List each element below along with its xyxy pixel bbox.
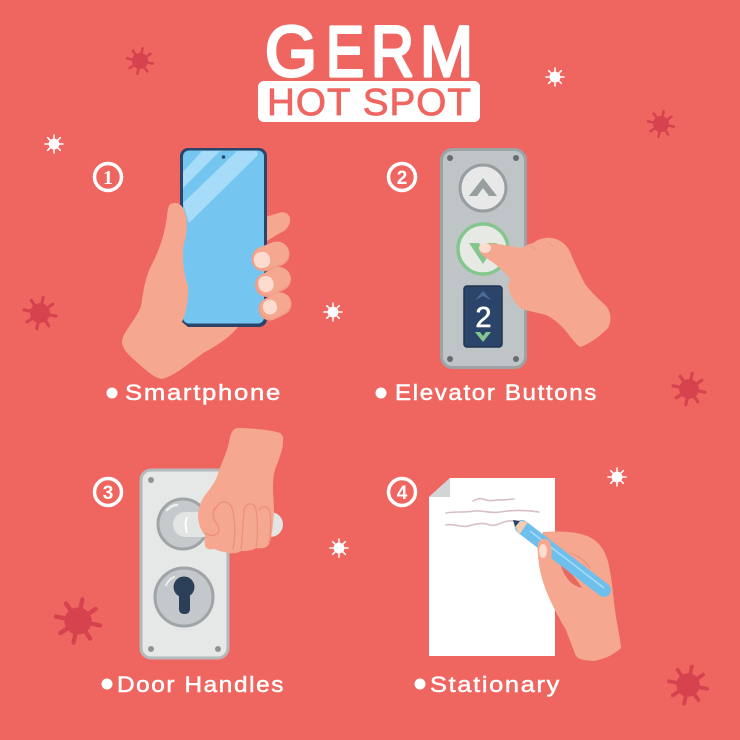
icon: index finger behind phone <box>262 212 290 244</box>
keyhole rosette <box>155 568 213 626</box>
badge: number 2 <box>388 164 416 190</box>
icon: thumb with nail <box>538 539 552 572</box>
button: down (pressed) <box>458 224 508 274</box>
icon: smartphone body <box>180 148 267 327</box>
badge: number 4 <box>388 478 416 506</box>
icon: pencil <box>513 520 604 590</box>
icon: palm and thumb <box>122 203 238 379</box>
title word: GERM: E <box>326 13 364 92</box>
title word: GERM: R <box>371 13 414 92</box>
subtitle banner: HOT SPOT: HOT SPOT <box>267 82 472 124</box>
panel: door handles <box>94 428 285 697</box>
decorative sparkles <box>45 68 626 557</box>
label: Smartphone: Smartphone <box>125 380 282 405</box>
icon: fingers over phone <box>264 253 280 309</box>
panel: elevator buttons <box>376 150 610 405</box>
icon: fingernails <box>252 250 279 316</box>
label: Elevator Buttons: Elevator Buttons <box>395 380 598 405</box>
icon: elevator panel <box>442 150 526 368</box>
icon: gripping hand <box>198 428 283 553</box>
badge: number 1: 1 <box>103 167 113 189</box>
title word: GERM: G <box>265 13 317 92</box>
icon: paper sheet <box>429 478 555 656</box>
icon: pointing hand <box>479 238 610 347</box>
badge: number 1 <box>94 164 122 190</box>
door knob rosette <box>158 499 208 549</box>
title word: GERM: M <box>420 13 473 92</box>
label: Door Handles: Door Handles <box>117 672 285 697</box>
floor display <box>464 286 502 347</box>
lever handle <box>173 512 283 537</box>
icon: door plate <box>141 470 283 658</box>
panel: stationary <box>388 478 621 697</box>
icon: writing hand <box>538 532 621 661</box>
label: Stationary: Stationary <box>430 672 561 697</box>
badge: number 3 <box>94 478 122 506</box>
panel: smartphone <box>94 148 290 405</box>
button: up <box>460 165 506 211</box>
title <box>258 13 480 124</box>
title word: GERM <box>265 13 473 92</box>
badge: number 2: 2 <box>397 168 407 189</box>
badge: number 3: 3 <box>103 483 113 504</box>
floor display: 2 <box>475 302 492 334</box>
badge: number 4: 4 <box>397 483 408 504</box>
